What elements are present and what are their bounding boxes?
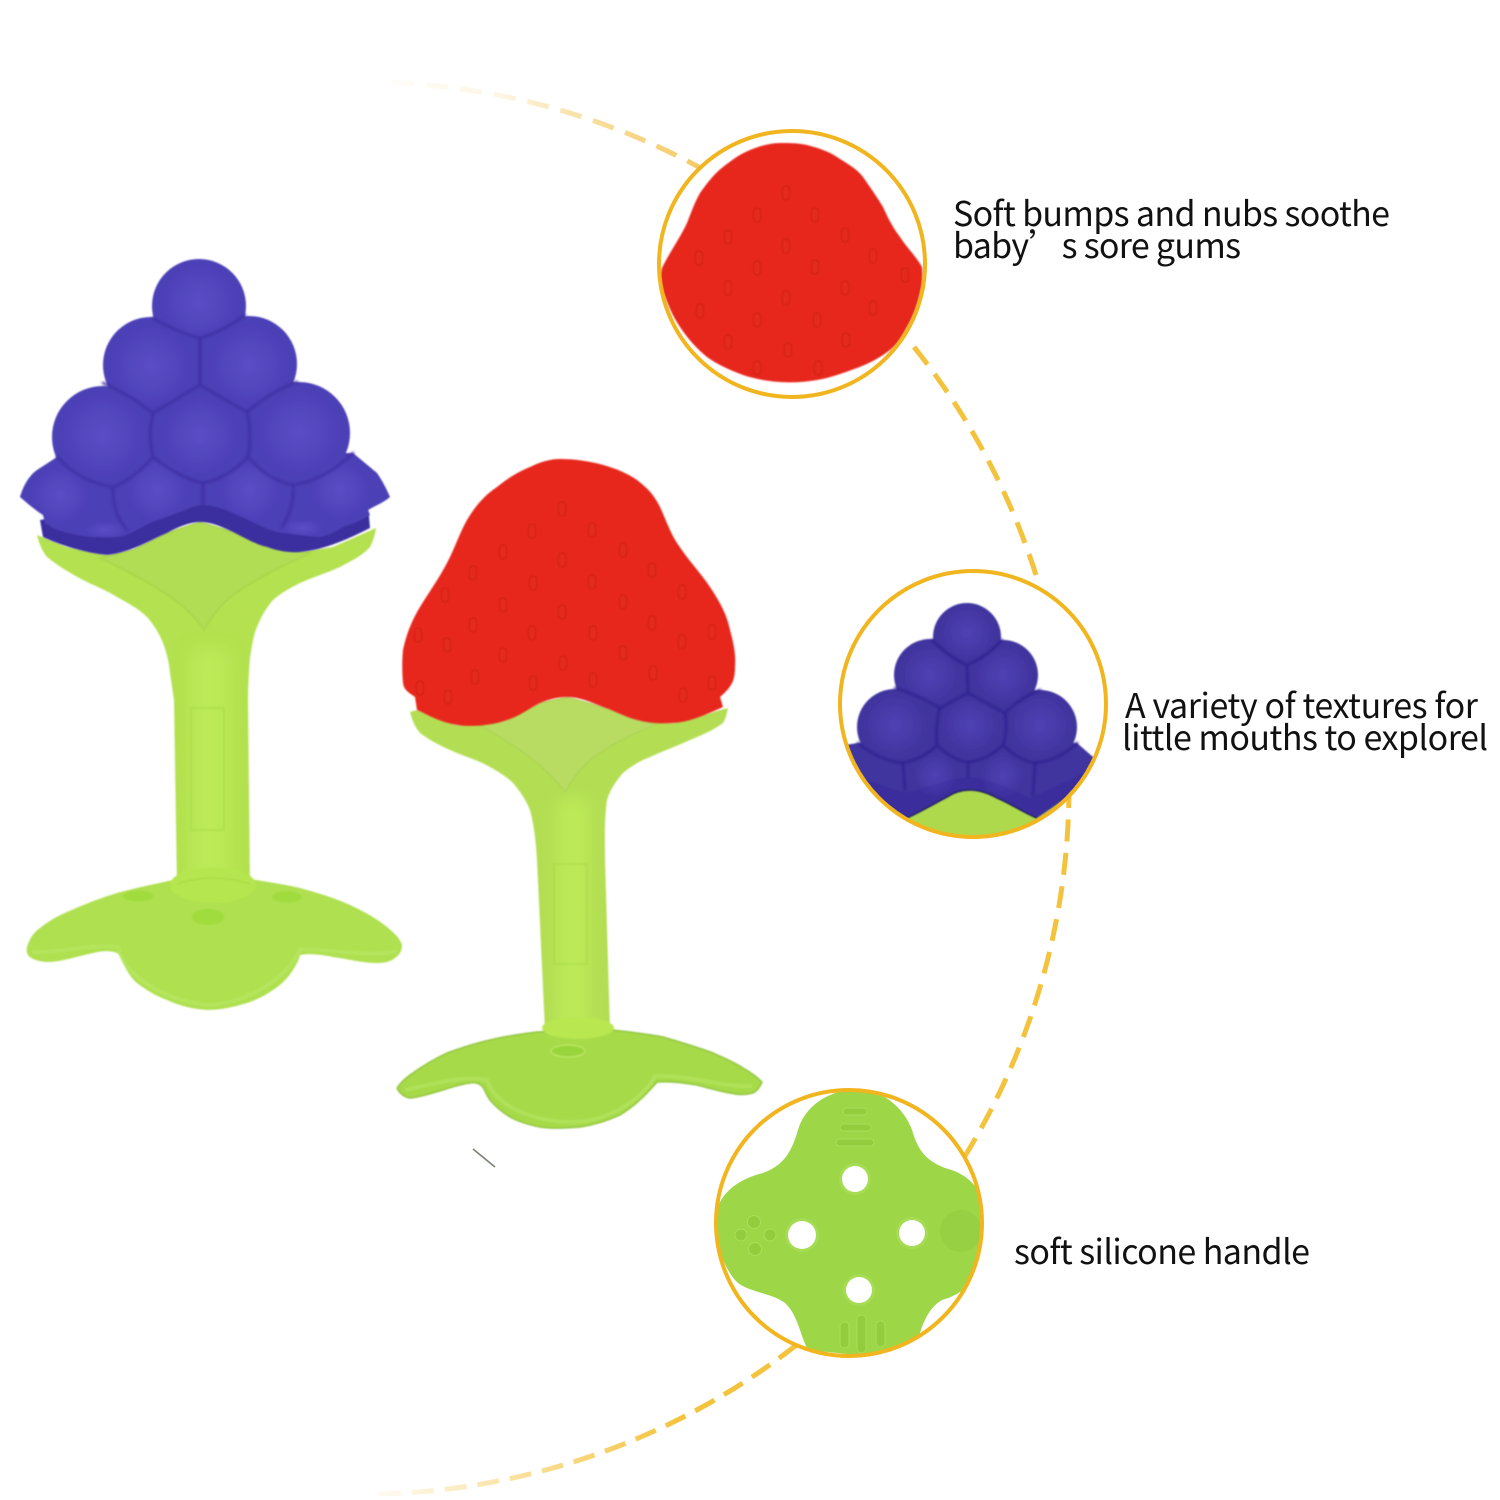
strawberry teether (397, 459, 762, 1128)
caption: textures: A variety of textures for (1125, 679, 1479, 728)
caption: textures (1122, 679, 1488, 760)
caption: soft bumps: baby’s sore gums (953, 219, 1241, 268)
caption: textures: little mouths to explorel (1122, 711, 1488, 760)
caption: soft bumps (953, 187, 1390, 268)
detail circle: strawberry (659, 131, 925, 397)
detail circle: base underside (716, 1089, 982, 1356)
grape teether handle and base (27, 522, 402, 1010)
detail circle: grapes (840, 571, 1106, 850)
caption: silicone handle: soft silicone handle (1014, 1225, 1310, 1274)
strawberry teether handle and base (397, 697, 762, 1128)
strawberry body (402, 459, 735, 726)
stray mark (473, 1149, 495, 1167)
grape cluster (20, 259, 390, 555)
callout: silicone handle (716, 1089, 1310, 1356)
callout: soft bumps (659, 131, 1390, 397)
grape teether (20, 259, 402, 1010)
dashed connector arc (379, 83, 1069, 1494)
caption: soft bumps: Soft bumps and nubs soothe (953, 187, 1390, 236)
callout: textures (840, 571, 1488, 850)
